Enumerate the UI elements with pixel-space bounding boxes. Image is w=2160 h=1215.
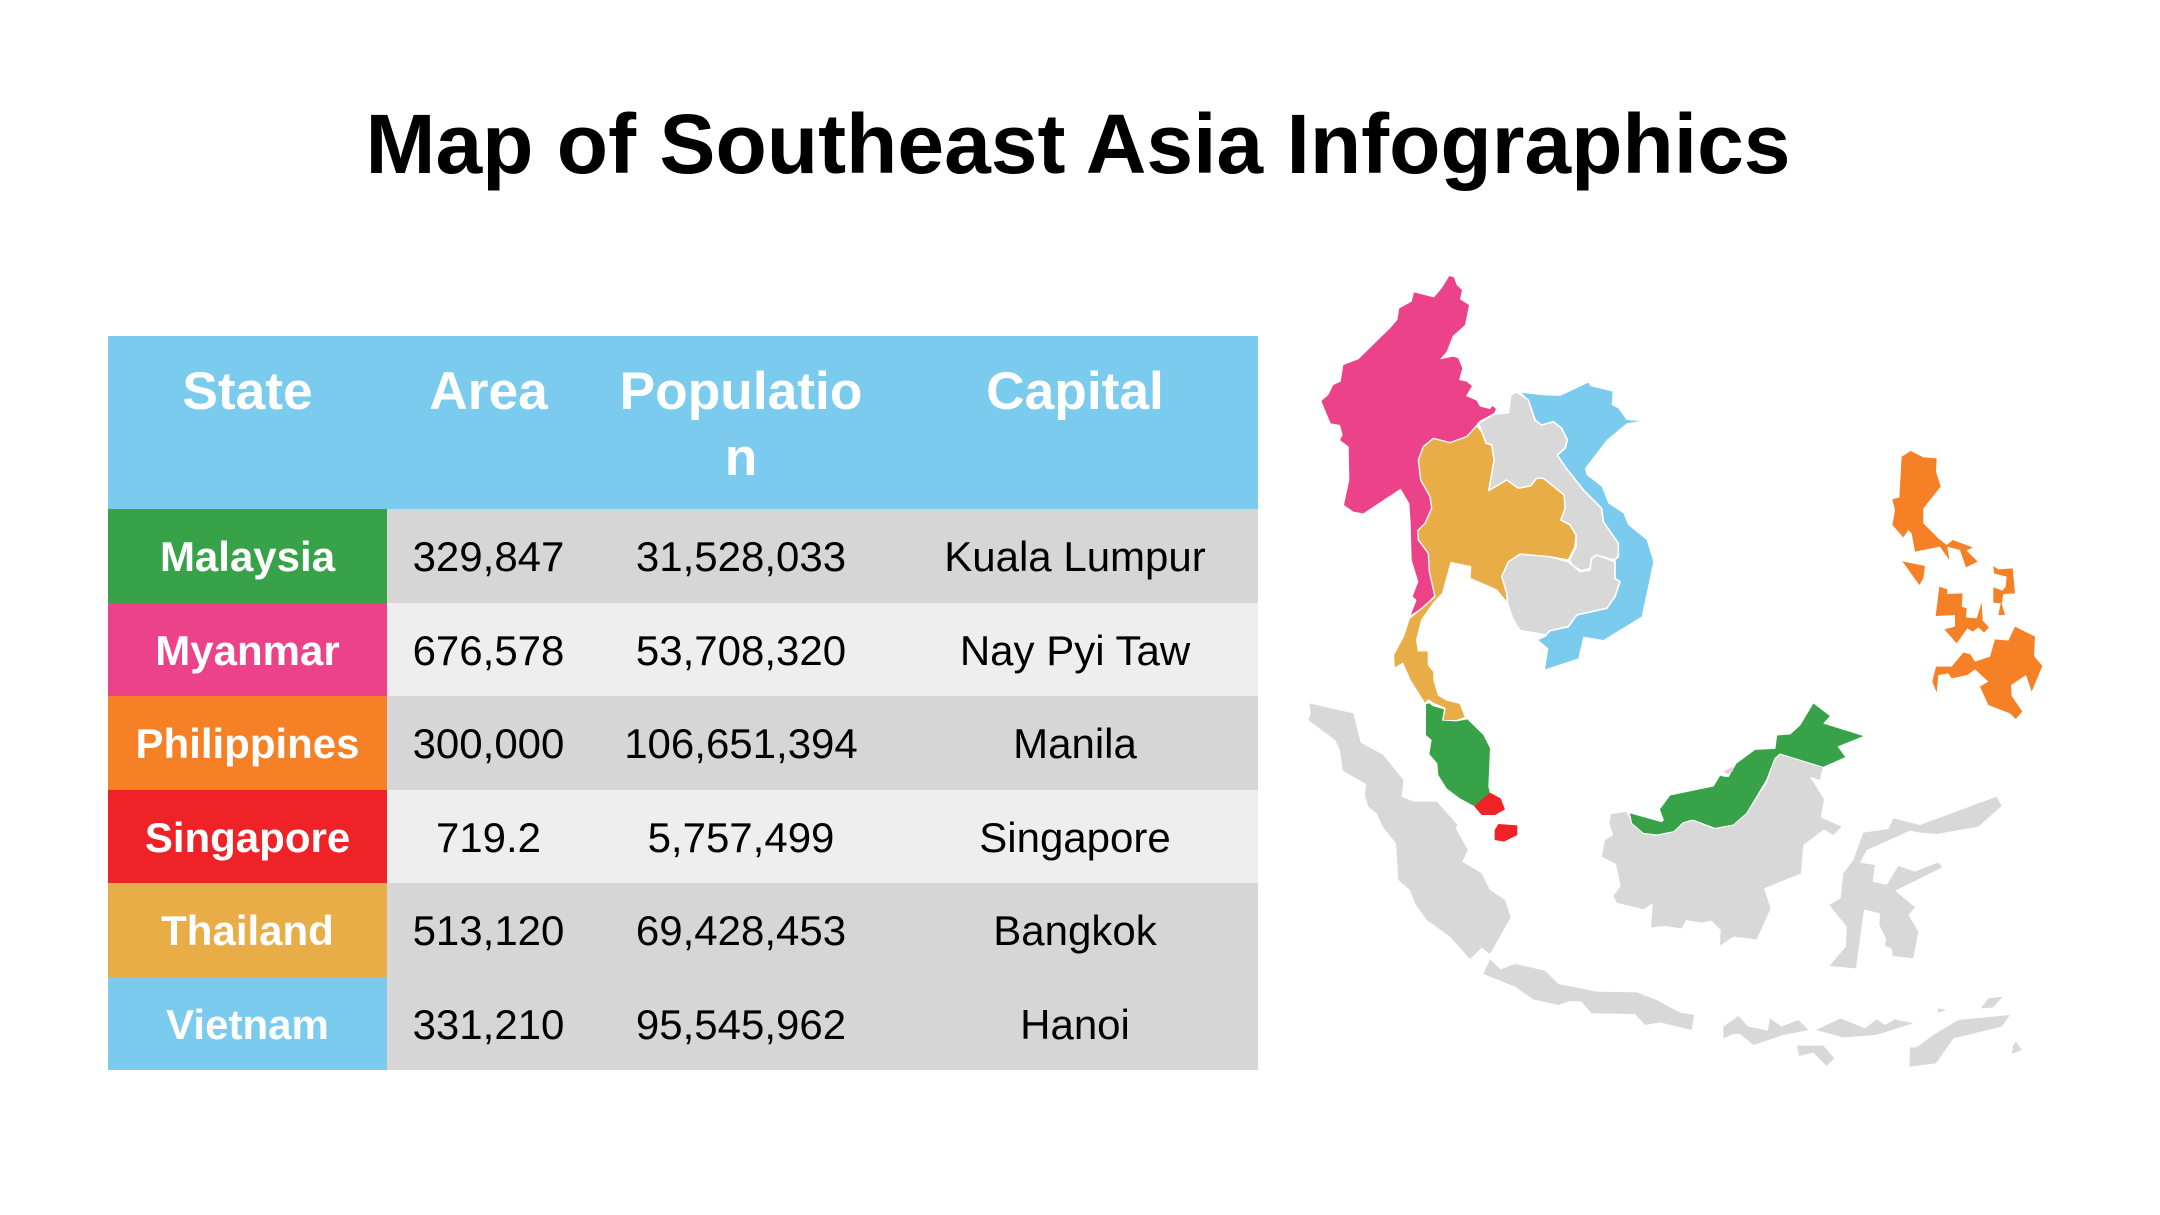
header: Population: Populatio (620, 362, 862, 421)
row: Malaysia (108, 509, 1258, 602)
island: Sumatra (1308, 703, 1511, 959)
table: country data (108, 336, 1258, 1070)
header: Population (620, 362, 862, 487)
row: Vietnam: Hanoi (1020, 1000, 1130, 1048)
row: Vietnam: 95,545,962 (636, 1000, 846, 1048)
row: Thailand: 513,120 (413, 907, 564, 954)
row: Singapore: Singapore (979, 814, 1171, 860)
row: Myanmar: 53,708,320 (636, 626, 846, 674)
island: Kalimantan (1602, 754, 1842, 946)
row: Myanmar: Myanmar (155, 626, 340, 674)
row: Philippines: 300,000 (413, 720, 564, 767)
header: Capital: Capital (986, 362, 1164, 421)
map: mainland countries (1321, 276, 1653, 721)
table header row (108, 336, 1258, 509)
header: Population: n (725, 428, 757, 487)
row: Philippines: Manila (1013, 720, 1137, 767)
row: Malaysia: 329,847 (413, 533, 564, 580)
row: Singapore (108, 790, 1258, 883)
island: Java (1483, 959, 1694, 1030)
row: Singapore: 5,757,499 (648, 814, 834, 860)
country: Malaysia Borneo (1629, 703, 1865, 835)
title: Map of Southeast Asia Infographics (365, 97, 1791, 191)
row: Malaysia: Malaysia (160, 533, 335, 580)
country: Cambodia (1502, 554, 1620, 635)
row: Malaysia: Kuala Lumpur (944, 533, 1206, 580)
row: Vietnam: Vietnam (166, 1000, 329, 1048)
header: State: State (182, 362, 313, 421)
row: Myanmar: Nay Pyi Taw (960, 626, 1190, 674)
row: Singapore: Singapore (145, 814, 350, 860)
row: Singapore: 719.2 (436, 814, 541, 860)
row: Vietnam: 331,210 (413, 1000, 564, 1048)
row: Myanmar: 676,578 (413, 626, 564, 674)
country: Myanmar (1321, 276, 1496, 615)
row: Myanmar (108, 602, 1258, 696)
row: Vietnam (108, 976, 1258, 1070)
country: Brunei (1723, 767, 1733, 774)
country: Thailand (1393, 426, 1576, 721)
island: Sulawesi (1829, 797, 2002, 968)
row: Philippines: Philippines (135, 720, 360, 767)
map: Borneo, Sulawesi and Lesser Sunda islands (1602, 703, 2022, 1067)
country: Laos (1478, 392, 1618, 571)
row: Thailand (108, 883, 1258, 976)
row: Thailand: Thailand (161, 907, 334, 954)
map: Malaysian peninsula, Singapore, Sumatra and Java (1308, 703, 1694, 1030)
row: Thailand: 69,428,453 (636, 907, 846, 954)
row: Thailand: Bangkok (993, 907, 1157, 954)
row: Philippines: 106,651,394 (624, 720, 858, 767)
header: Area: Area (429, 362, 548, 421)
row: Malaysia: 31,528,033 (636, 533, 846, 580)
country: Malaysia peninsula (1426, 703, 1490, 806)
row: Philippines (108, 696, 1258, 790)
country: Singapore (1474, 793, 1517, 842)
country: Vietnam (1522, 383, 1653, 669)
islands: Lesser Sunda (1723, 997, 2022, 1067)
country: Philippines (1892, 451, 2042, 719)
